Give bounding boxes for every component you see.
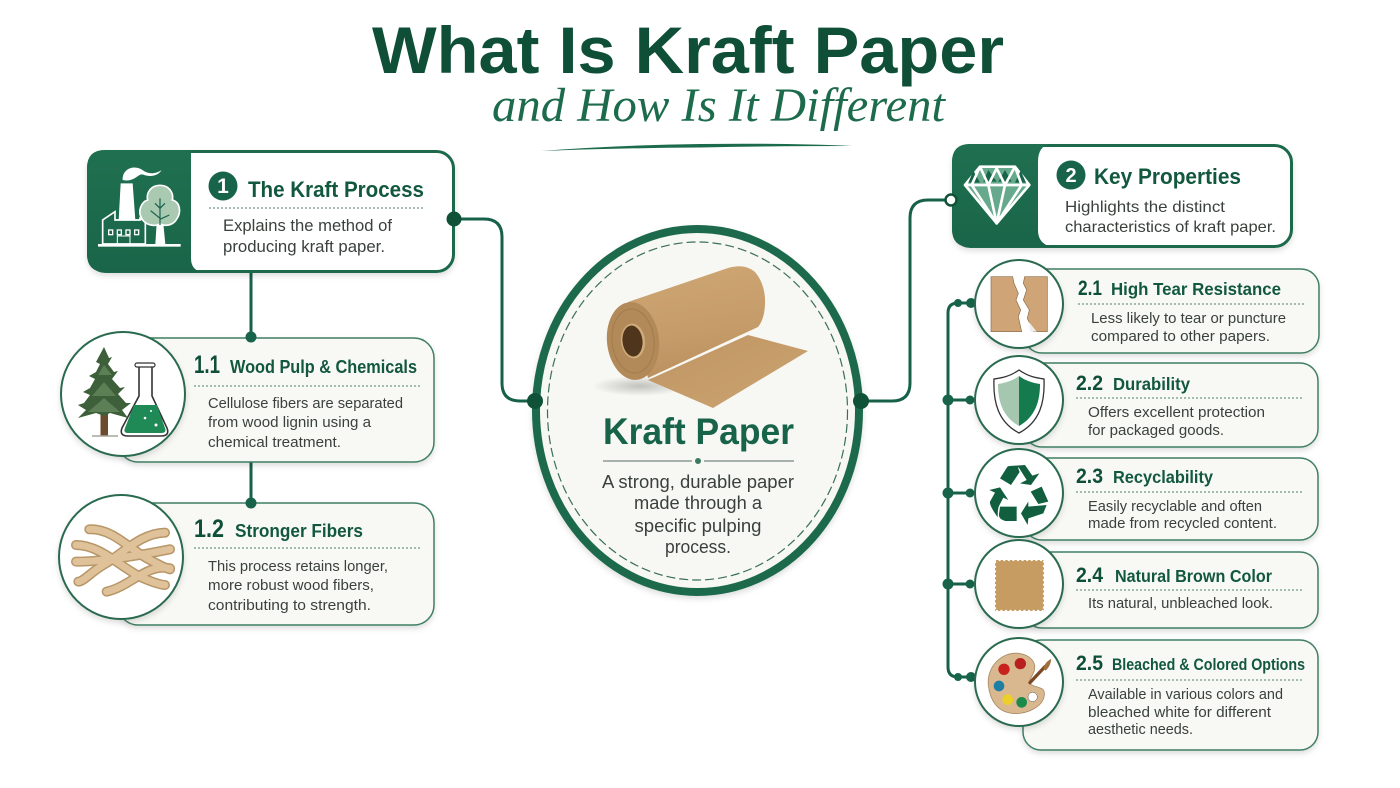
description: Offers excellent protection [1088, 405, 1265, 421]
description: This process retains longer, [208, 558, 388, 575]
icon: paint palette [988, 653, 1051, 714]
heading: Recyclability [1113, 467, 1213, 487]
node: process output [446, 212, 462, 226]
panel: 1.2 stronger fibers [59, 495, 434, 625]
panel: 2.3 recyclability [975, 449, 1318, 540]
description: producing kraft paper. [223, 238, 385, 256]
heading: Key Properties [1094, 164, 1241, 189]
description: contributing to strength. [208, 597, 371, 614]
number: 1.1 [194, 351, 220, 379]
heading: Wood Pulp & Chemicals [230, 356, 417, 377]
description: Easily recyclable and often [1088, 499, 1262, 515]
description: Available in various colors and [1088, 687, 1283, 703]
node: center left [527, 393, 543, 409]
heading: Stronger Fibers [235, 520, 363, 541]
description: Explains the method of [223, 217, 392, 235]
heading: High Tear Resistance [1111, 279, 1281, 299]
description: chemical treatment. [208, 434, 341, 451]
icon: shield [994, 370, 1044, 433]
step number 1 [208, 172, 238, 200]
connector: process to center [454, 219, 535, 401]
icon disc [975, 260, 1063, 348]
number: 1.2 [194, 515, 224, 543]
icon disc [975, 638, 1063, 726]
icon: flask [121, 363, 168, 436]
junction dot [246, 498, 256, 508]
icon: kraft paper roll [592, 266, 808, 408]
panel: central kraft paper [536, 229, 859, 592]
icon disc [975, 356, 1063, 444]
heading: Natural Brown Color [1115, 566, 1272, 586]
icon: kraft swatch [995, 560, 1044, 611]
icon disc [61, 332, 185, 456]
description: Cellulose fibers are separated [208, 395, 403, 412]
heading: Durability [1113, 374, 1190, 394]
step number 1: 1 [217, 175, 229, 198]
description: more robust wood fibers, [208, 577, 374, 594]
icon disc [975, 449, 1063, 537]
number: 2.4 [1076, 564, 1103, 587]
panel: 2.2 durability [975, 356, 1318, 447]
connector: center to properties [861, 200, 951, 401]
heading: The Kraft Process [248, 177, 424, 202]
description: Less likely to tear or puncture [1091, 311, 1286, 327]
title: What Is Kraft Paper [372, 13, 1004, 87]
node: open connector [946, 194, 956, 206]
icon: factory and tree [98, 168, 181, 247]
panel: the kraft process [87, 150, 454, 272]
heading: Bleached & Colored Options [1112, 655, 1305, 674]
description: Its natural, unbleached look. [1088, 596, 1273, 612]
description: A strong, durable paper [602, 472, 794, 492]
icon disc [975, 540, 1063, 628]
description: compared to other papers. [1091, 329, 1270, 345]
icon: recycling arrows [989, 465, 1048, 525]
icon: fir tree [78, 347, 131, 436]
description: specific pulping [634, 516, 762, 536]
description: bleached white for different [1088, 705, 1271, 721]
heading: Kraft Paper [603, 411, 794, 452]
panel: 1.1 wood pulp and chemicals [61, 332, 434, 462]
panel: key properties [952, 144, 1292, 247]
icon: torn paper [991, 277, 1047, 332]
description: characteristics of kraft paper. [1065, 219, 1276, 236]
description: from wood lignin using a [208, 414, 372, 431]
step number 2 [1056, 160, 1086, 190]
description: for packaged goods. [1088, 423, 1224, 439]
subtitle: and How Is It Different [492, 79, 947, 132]
number: 2.3 [1076, 465, 1103, 488]
description: made from recycled content. [1088, 516, 1277, 532]
step number 2: 2 [1065, 165, 1077, 187]
junction dot [246, 332, 256, 342]
connector: process to sub-items [250, 272, 252, 503]
number: 2.1 [1078, 277, 1102, 300]
node: center right [853, 393, 869, 409]
icon disc [59, 495, 183, 619]
connector: properties spine [942, 298, 976, 682]
panel: 2.1 high tear resistance [975, 260, 1319, 353]
description: Highlights the distinct [1065, 199, 1226, 216]
number: 2.5 [1076, 652, 1103, 675]
icon: diamond [965, 167, 1029, 223]
description: process. [665, 537, 731, 557]
panel: 2.4 natural brown color [975, 540, 1318, 628]
title underline swoosh [541, 144, 852, 151]
number: 2.2 [1076, 372, 1103, 395]
description: made through a [634, 493, 763, 513]
description: aesthetic needs. [1088, 722, 1193, 738]
icon: wood fibers [76, 529, 170, 592]
panel: 2.5 bleached and colored options [975, 638, 1318, 750]
divider [603, 458, 794, 464]
